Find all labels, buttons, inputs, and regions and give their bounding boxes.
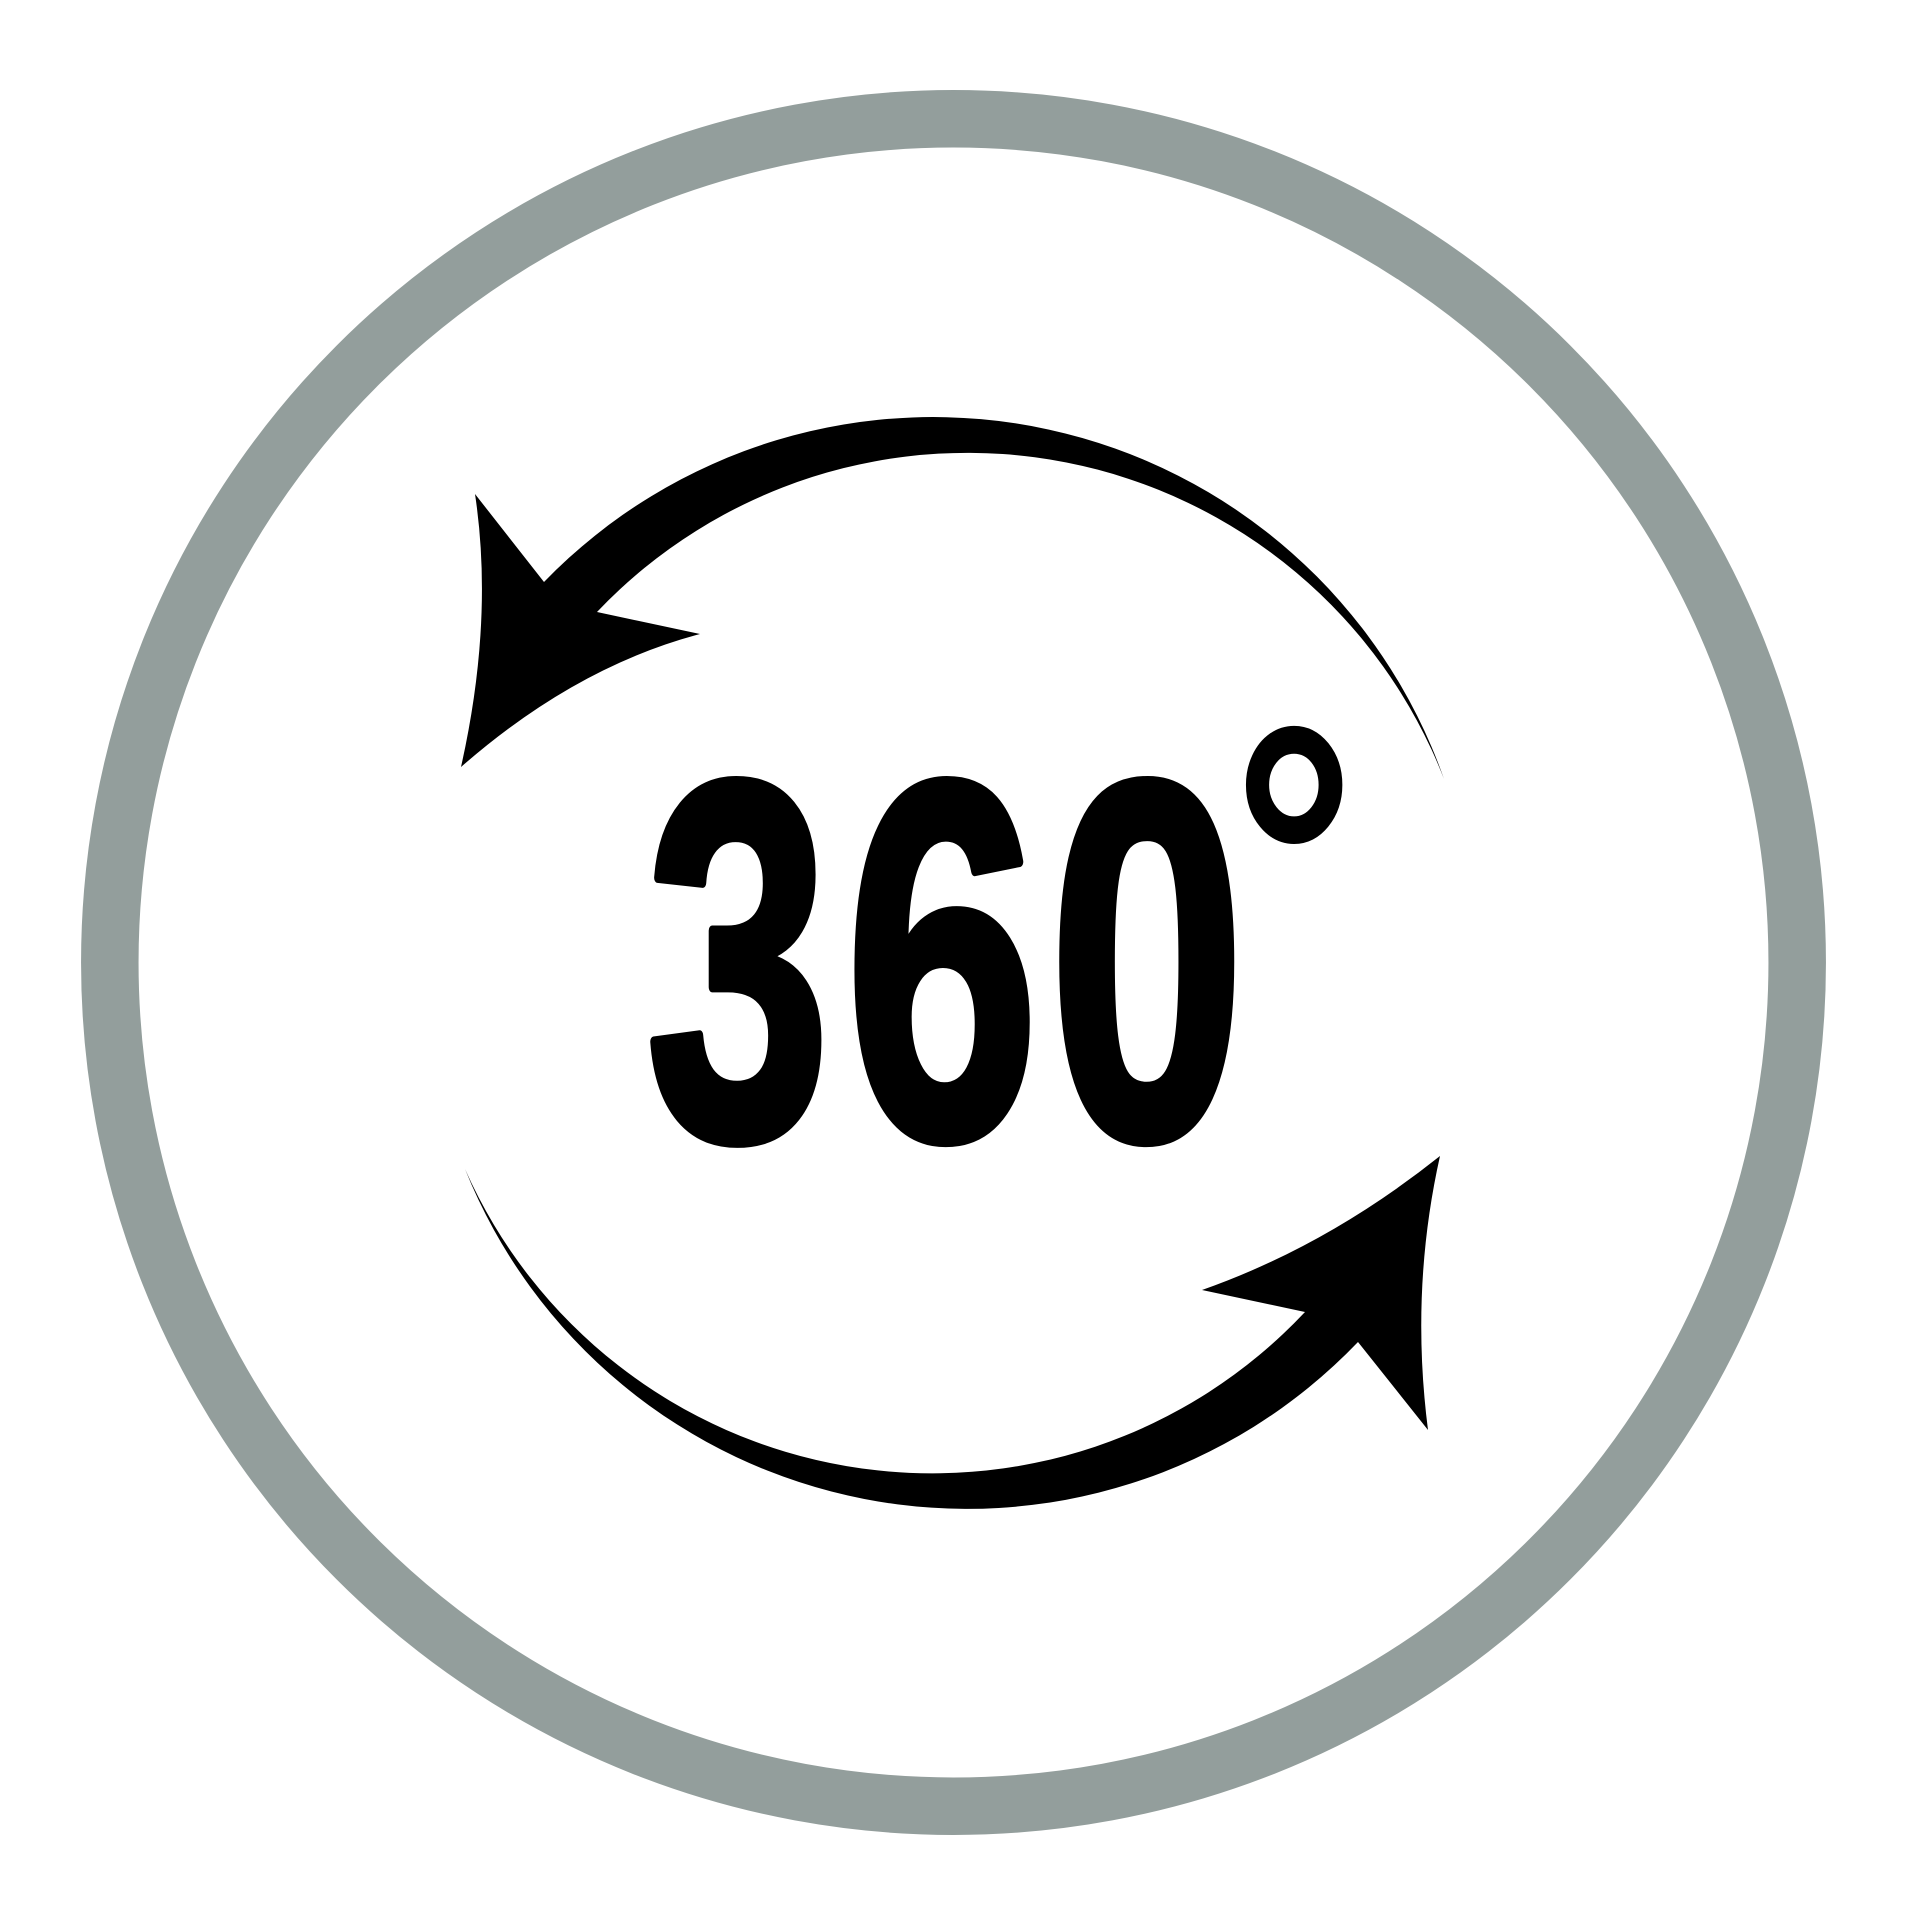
digit 6: 6 bbox=[845, 677, 1039, 1246]
digit 0: 0 bbox=[1049, 675, 1245, 1245]
grey outer ring bbox=[110, 119, 1797, 1806]
arrow: bottom, counter-clockwise bbox=[465, 1156, 1440, 1509]
360 degree label bbox=[646, 645, 1356, 1246]
digit 3: 3 bbox=[646, 677, 830, 1246]
arrow: top, counter-clockwise bbox=[461, 417, 1444, 779]
degree symbol: ° bbox=[1232, 645, 1356, 1075]
